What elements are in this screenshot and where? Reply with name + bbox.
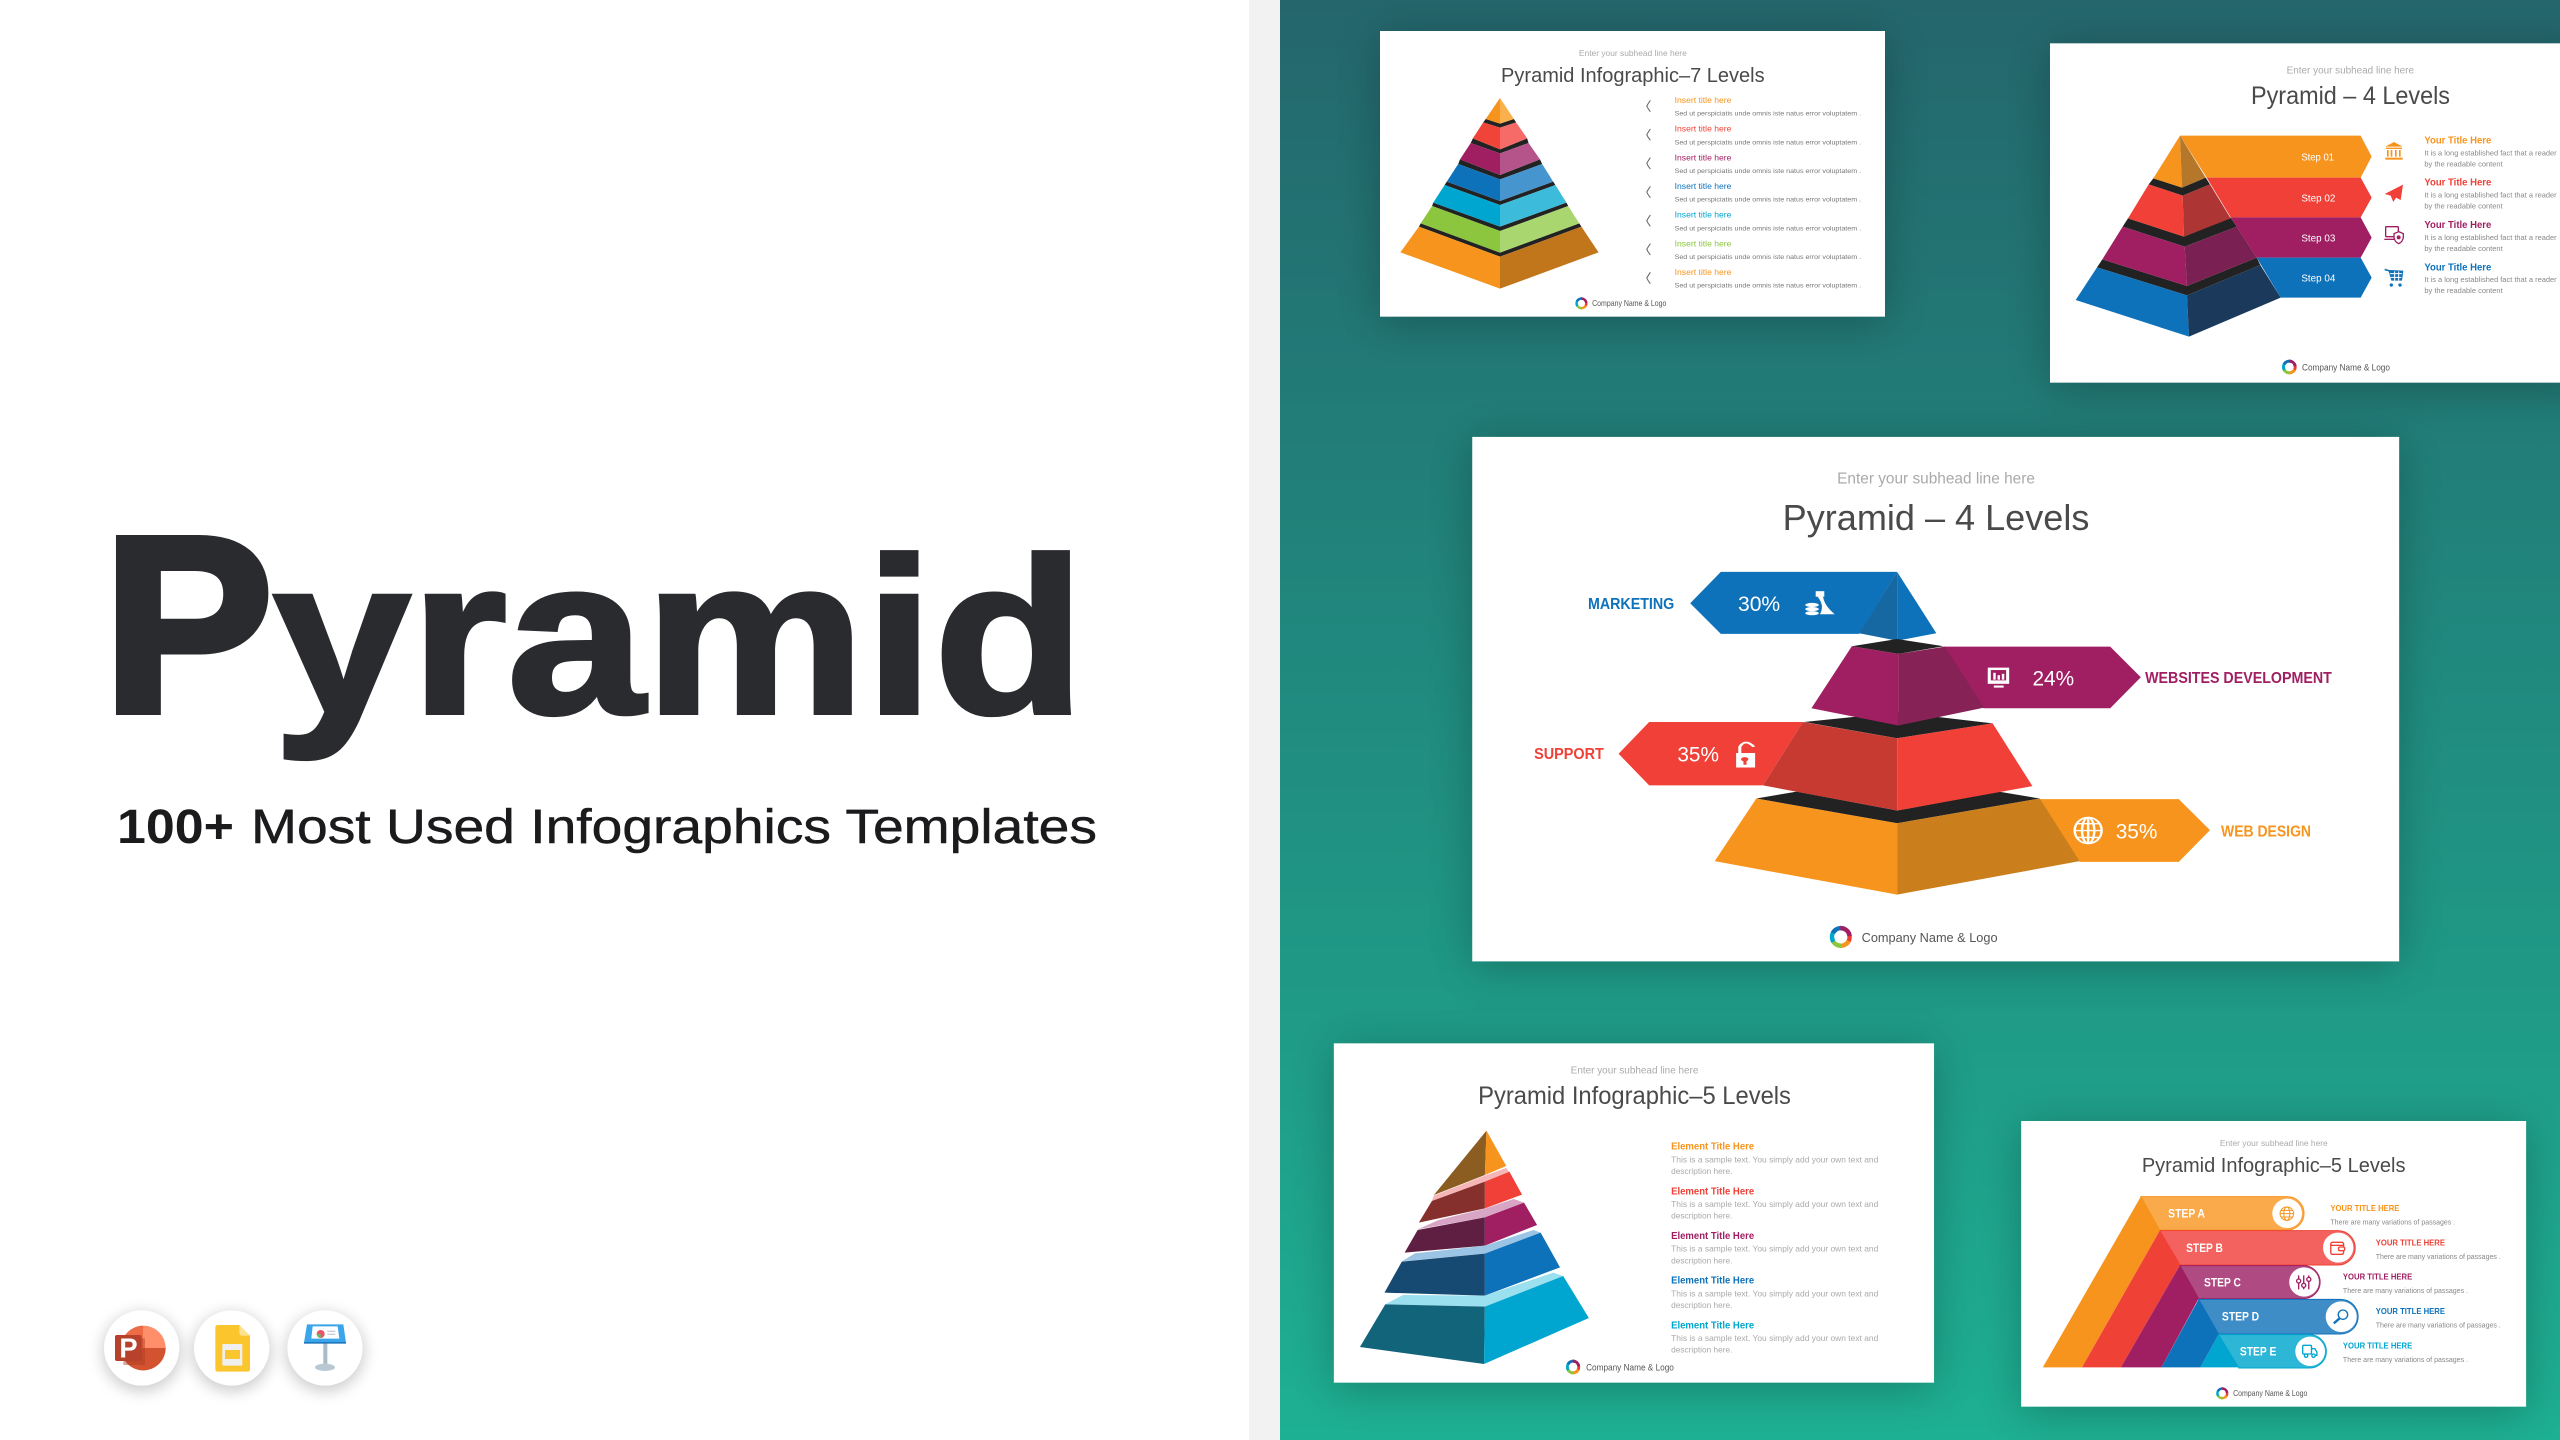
- step descriptions: There are many variations of passages .: [2343, 1286, 2468, 1295]
- step descriptions: Your Title Here: [2424, 178, 2492, 189]
- icon: shopping cart: [2385, 269, 2403, 287]
- segment: marketing: MARKETING: [1588, 595, 1674, 613]
- company logo: Company Name & Logo: [1592, 298, 1667, 308]
- list of seven items: Sed ut perspiciatis unde omnis iste natus error voluptatem .: [1675, 168, 1861, 175]
- icon: magnifier: [2334, 1310, 2348, 1323]
- grey divider strip: [1249, 0, 1280, 1440]
- panel: Pyramid Infographic 5 Levels split: [1334, 1043, 1934, 1383]
- list of seven items: Insert title here: [1675, 239, 1732, 248]
- step descriptions: YOUR TITLE HERE: [2343, 1271, 2412, 1281]
- subhead: Enter your subhead line here: [2287, 65, 2414, 76]
- teal gradient background: [1280, 0, 2560, 1440]
- list of seven items: Insert title here: [1675, 210, 1732, 220]
- step labels: STEP D: [2222, 1311, 2259, 1324]
- element list: Element Title Here: [1671, 1186, 1754, 1197]
- step ribbons: Step 01: [2301, 153, 2334, 164]
- step labels: STEP C: [2204, 1276, 2241, 1289]
- pyramid sides: [2043, 1197, 2239, 1367]
- segment: marketing: 30%: [1738, 591, 1780, 616]
- step descriptions: YOUR TITLE HERE: [2376, 1237, 2445, 1247]
- panel: Pyramid Infographic 5 Levels steps: [2021, 1121, 2526, 1407]
- element list: Element Title Here: [1671, 1231, 1754, 1242]
- step descriptions: by the readable content: [2424, 286, 2504, 295]
- pyramid 7 levels: [1400, 98, 1599, 289]
- company logo: Company Name & Logo: [2233, 1389, 2308, 1398]
- list of seven items: Insert title here: [1675, 181, 1732, 191]
- main title: [103, 485, 1085, 764]
- step labels: STEP B: [2186, 1242, 2223, 1255]
- step ribbons: Step 03: [2301, 233, 2336, 244]
- panel: Pyramid 4 Levels percentages: WEB DESIGN: [2221, 822, 2311, 840]
- segment: marketing: [1588, 572, 1936, 641]
- segment: web design: 35%: [2116, 819, 2157, 843]
- step descriptions: It is a long established fact that a reader: [2424, 233, 2557, 242]
- step descriptions: by the readable content: [2424, 244, 2504, 253]
- segment: websites development: 24%: [2032, 666, 2074, 690]
- step descriptions: YOUR TITLE HERE: [2376, 1306, 2445, 1316]
- list of seven items: Sed ut perspiciatis unde omnis iste natus error voluptatem .: [1675, 283, 1861, 290]
- chevron markers: [1647, 100, 1650, 284]
- panel: Pyramid 4 Levels percentages: [1472, 437, 2399, 961]
- company logo: Company Name & Logo: [2302, 362, 2390, 372]
- segment: support: SUPPORT: [1534, 745, 1604, 763]
- element list: description here.: [1671, 1345, 1732, 1355]
- panel: Pyramid Infographic 7 Levels: [1380, 31, 1885, 317]
- element list: description here.: [1671, 1301, 1732, 1311]
- subhead: Enter your subhead line here: [2220, 1138, 2328, 1148]
- list of seven items: Sed ut perspiciatis unde omnis iste natus error voluptatem .: [1675, 254, 1861, 261]
- company logo: [1565, 1359, 1674, 1375]
- subtitle: Most Used Infographics Templates: [251, 801, 1097, 854]
- icon: Google Slides: [192, 1310, 271, 1391]
- step ribbons: Step 02: [2301, 193, 2336, 204]
- element list: description here.: [1671, 1256, 1732, 1266]
- step descriptions: There are many variations of passages .: [2330, 1218, 2455, 1227]
- icon: PowerPoint: [102, 1310, 181, 1391]
- subhead: Enter your subhead line here: [1579, 48, 1687, 58]
- segment: websites development: WEBSITES DEVELOPMENT: [2145, 669, 2332, 687]
- step descriptions: It is a long established fact that a reader: [2424, 148, 2557, 157]
- element list: This is a sample text. You simply add your own text and: [1671, 1244, 1878, 1254]
- step descriptions: by the readable content: [2424, 159, 2504, 168]
- element list: This is a sample text. You simply add your own text and: [1671, 1334, 1878, 1344]
- list of seven items: Insert title here: [1675, 267, 1732, 277]
- ribbons and rings: [2141, 1197, 2358, 1368]
- step labels: STEP E: [2240, 1345, 2276, 1358]
- step descriptions: It is a long established fact that a reader: [2424, 275, 2557, 284]
- icon: bank: [2385, 142, 2403, 160]
- icon: paper plane: [2385, 185, 2403, 202]
- element list: description here.: [1671, 1167, 1732, 1177]
- step labels: STEP A: [2168, 1208, 2205, 1221]
- heading: Pyramid Infographic–5 Levels: [1478, 1081, 1791, 1109]
- subtitle: 100+: [117, 801, 234, 854]
- element list: This is a sample text. You simply add your own text and: [1671, 1289, 1878, 1299]
- list of seven items: Insert title here: [1675, 124, 1732, 134]
- list of seven items: Insert title here: [1675, 153, 1732, 162]
- icon: sliders: [2297, 1275, 2311, 1289]
- list of seven items: [1675, 95, 1861, 290]
- element list: Element Title Here: [1671, 1320, 1754, 1331]
- step descriptions: YOUR TITLE HERE: [2330, 1203, 2400, 1213]
- icon: PowerPoint: P: [119, 1332, 138, 1363]
- step descriptions: YOUR TITLE HERE: [2343, 1340, 2412, 1350]
- main title: P: [103, 485, 273, 764]
- company logo: [2216, 1387, 2308, 1400]
- step labels: [2168, 1208, 2276, 1358]
- subhead: Enter your subhead line here: [1837, 469, 2035, 487]
- element list: Element Title Here: [1671, 1141, 1754, 1152]
- panel: Pyramid 4 Levels steps: [2050, 43, 2560, 383]
- element list: Element Title Here: [1671, 1275, 1754, 1286]
- segment: support: [1534, 722, 2040, 823]
- icon: truck: [2303, 1345, 2317, 1357]
- list of seven items: Insert title here: [1675, 95, 1732, 105]
- subhead: Enter your subhead line here: [1571, 1065, 1698, 1076]
- heading: Pyramid – 4 Levels: [1783, 498, 2089, 538]
- company logo: [2281, 359, 2390, 375]
- heading: Pyramid – 4 Levels: [2251, 82, 2450, 110]
- black cap: [1852, 639, 1944, 654]
- pyramid 5 split levels: [1360, 1131, 1589, 1364]
- segment: websites development: [1804, 646, 2332, 738]
- company logo: Company Name & Logo: [1862, 930, 1998, 945]
- list of seven items: Sed ut perspiciatis unde omnis iste natus error voluptatem .: [1675, 197, 1861, 204]
- company logo: [1575, 297, 1667, 310]
- pyramid 4 levels: [2076, 136, 2281, 337]
- main title: yramid: [273, 513, 1085, 761]
- app icons row: [102, 1310, 364, 1391]
- heading: Pyramid Infographic–5 Levels: [2142, 1155, 2405, 1177]
- step descriptions: There are many variations of passages .: [2376, 1321, 2501, 1330]
- icon: wallet: [2331, 1242, 2345, 1254]
- list of seven items: Sed ut perspiciatis unde omnis iste natus error voluptatem .: [1675, 111, 1861, 118]
- element list: This is a sample text. You simply add your own text and: [1671, 1200, 1878, 1210]
- step descriptions: by the readable content: [2424, 202, 2504, 211]
- step descriptions: [2424, 136, 2557, 295]
- company logo: [1829, 925, 1998, 949]
- list of seven items: Sed ut perspiciatis unde omnis iste natus error voluptatem .: [1675, 140, 1861, 146]
- element list: [1671, 1141, 1878, 1355]
- step descriptions: Your Title Here: [2424, 262, 2492, 273]
- step descriptions: There are many variations of passages .: [2376, 1252, 2501, 1261]
- step ribbons: Step 04: [2301, 273, 2336, 284]
- left white panel: [0, 0, 1249, 1440]
- segment: web design: [1715, 798, 2311, 895]
- element list: This is a sample text. You simply add your own text and: [1671, 1155, 1878, 1165]
- icon: Keynote: [286, 1310, 364, 1391]
- element list: description here.: [1671, 1211, 1732, 1221]
- step ribbons: [2180, 136, 2372, 298]
- icon: globe: [2280, 1207, 2294, 1220]
- step descriptions: [2330, 1203, 2501, 1364]
- step descriptions: Your Title Here: [2424, 136, 2492, 147]
- panel shadows: [1334, 37, 2560, 1413]
- step descriptions: There are many variations of passages .: [2343, 1355, 2468, 1364]
- list of seven items: Sed ut perspiciatis unde omnis iste natus error voluptatem .: [1675, 226, 1861, 232]
- heading: Pyramid Infographic–7 Levels: [1501, 65, 1765, 87]
- step descriptions: It is a long established fact that a reader: [2424, 191, 2557, 200]
- segment: support: 35%: [1677, 742, 1719, 767]
- company logo: Company Name & Logo: [1586, 1363, 1674, 1373]
- step descriptions: Your Title Here: [2424, 220, 2492, 231]
- icon: laptop with shield: [2384, 227, 2403, 244]
